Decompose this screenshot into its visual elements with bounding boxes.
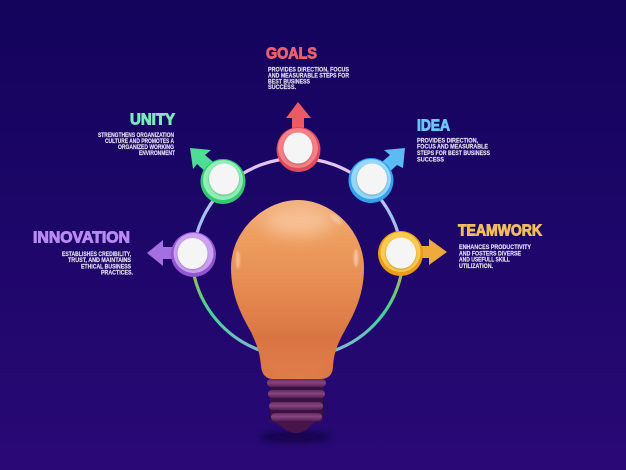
description: goals: SUCCESS.: [268, 85, 296, 91]
bulb screw base: [267, 378, 326, 433]
description: teamwork: ENHANCES PRODUCTIVITY: [459, 245, 531, 251]
description: teamwork: AND USEFULL SKILL: [459, 258, 510, 264]
description: unity: ENVIRONMENT: [139, 151, 175, 157]
description: idea: FOCUS AND MEASURABLE: [417, 144, 488, 150]
heading: goals: GOALS: [266, 46, 317, 62]
heading: innovation: INNOVATION: [33, 230, 130, 246]
description: unity: ORGANIZED WORKING: [118, 145, 174, 151]
description: teamwork: AND FOSTERS DIVERSE: [459, 252, 521, 258]
description: unity: STRENGTHENS ORGANIZATION: [98, 133, 174, 139]
arrow: teamwork: [416, 239, 447, 265]
node: teamwork: [378, 231, 447, 276]
ring connecting the nodes: [193, 158, 402, 351]
description: idea: STEPS FOR BEST BUSINESS: [417, 151, 490, 157]
description: teamwork: UTILIZATION.: [459, 264, 493, 270]
description: innovation: TRUST, AND MAINTAINS: [68, 258, 131, 264]
description: innovation: ETHICAL BUSINESS: [81, 264, 131, 270]
text block: goals: [266, 46, 350, 91]
text block: teamwork: [458, 222, 543, 270]
description: idea: SUCCESS: [417, 158, 444, 164]
arrow: unity: [190, 148, 218, 176]
description: goals: [268, 68, 350, 91]
text block: idea: [417, 118, 490, 164]
arrow: goals: [286, 102, 311, 130]
text block: unity: [98, 112, 176, 157]
description: goals: BEST BUSINESS: [268, 80, 310, 86]
heading: unity: UNITY: [130, 112, 176, 128]
description: goals: AND MEASURABLE STEPS FOR: [268, 74, 350, 80]
arrow: innovation: [147, 240, 178, 266]
description: teamwork: [459, 245, 531, 270]
arrow: idea: [376, 148, 405, 177]
description: unity: CULTURE AND PROMOTES A: [105, 139, 175, 145]
description: innovation: ESTABLISHES CREDIBILITY,: [62, 252, 131, 258]
node: innovation: [147, 232, 216, 277]
bulb glass: [231, 200, 364, 379]
ground shadow: [259, 434, 331, 440]
description: idea: [417, 138, 490, 164]
description: goals: PROVIDES DIRECTION, FOCUS: [268, 68, 349, 74]
text block: innovation: [33, 230, 133, 276]
heading: idea: IDEA: [417, 118, 450, 134]
heading: teamwork: TEAMWORK: [458, 222, 543, 240]
description: idea: PROVIDES DIRECTION,: [417, 138, 478, 144]
description: unity: [98, 133, 175, 157]
light bulb: [231, 200, 364, 433]
node: idea: [348, 148, 405, 203]
description: innovation: [62, 252, 133, 276]
node: goals: [276, 102, 320, 172]
node: unity: [190, 148, 246, 204]
description: innovation: PRACTICES.: [101, 270, 133, 276]
